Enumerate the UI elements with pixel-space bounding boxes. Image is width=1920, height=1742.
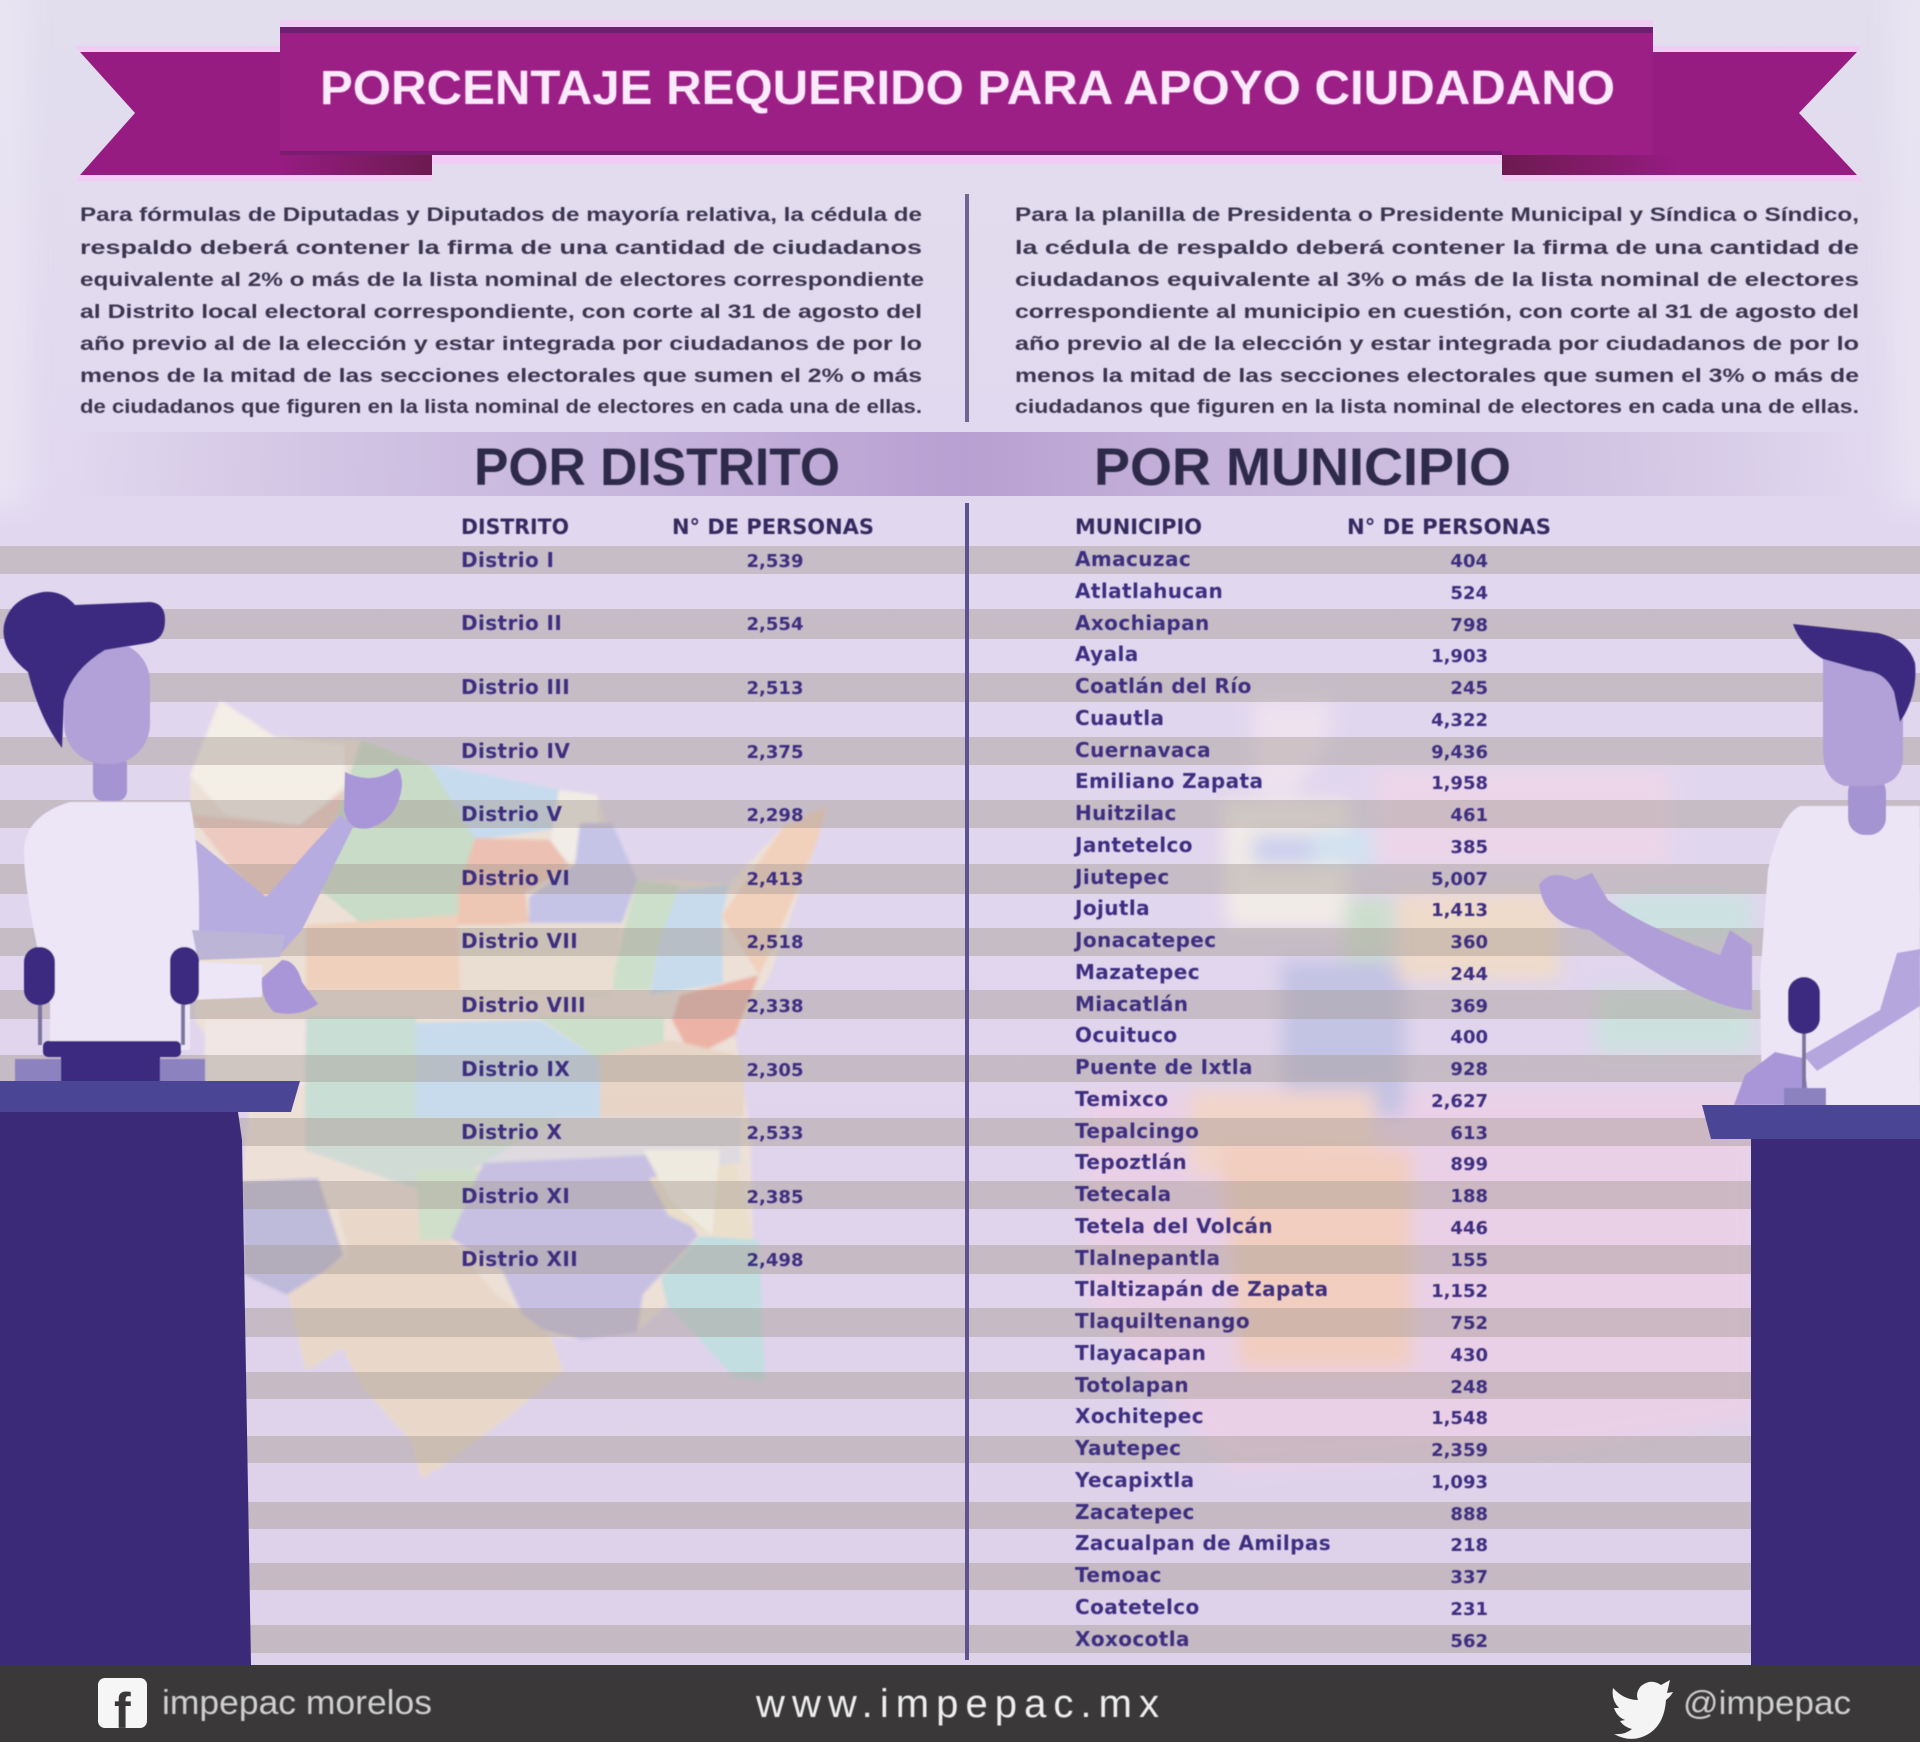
- column: distritos: Distrio II: [461, 611, 562, 635]
- column: personas por municipio: 798: [1450, 615, 1488, 636]
- column: municipios: Amacuzac: [1075, 547, 1191, 571]
- column: personas por municipio: 1,413: [1431, 900, 1488, 921]
- column: municipios: Tepalcingo: [1075, 1119, 1199, 1143]
- column: distritos: Distrio III: [461, 675, 570, 699]
- column: personas por municipio: 1,093: [1431, 1472, 1488, 1493]
- column: distritos: Distrio IV: [461, 739, 570, 763]
- text block: diputaciones: de ciudadanos que figuren en la lista nominal de electores en cada una de ellas.: [80, 397, 922, 418]
- text block: diputaciones: respaldo deberá contener la firma de una cantidad de ciudadanos: [80, 238, 922, 259]
- column: personas por distrito: 2,413: [747, 869, 803, 890]
- column: distritos: Distrio X: [461, 1120, 563, 1144]
- text block: planilla municipal: ciudadanos equivalente al 3% o más de la lista nominal de electores: [1015, 270, 1859, 291]
- column: personas por municipio: 562: [1450, 1631, 1488, 1652]
- column: personas por municipio: 524: [1450, 583, 1488, 604]
- torso: [24, 802, 262, 1050]
- column: municipios: Jiutepec: [1073, 865, 1170, 889]
- text block: diputaciones: al Distrito local electoral correspondiente, con corte al 31 de agosto del: [80, 302, 922, 323]
- column: distritos: Distrio VIII: [461, 993, 586, 1017]
- column: distritos: Distrio I: [461, 548, 554, 572]
- microphone left: [24, 947, 55, 1005]
- column: municipios: Tetecala: [1075, 1182, 1172, 1206]
- face: [64, 642, 150, 764]
- facebook handle: impepac morelos: [162, 1684, 432, 1722]
- text block: diputaciones: año previo al de la elección y estar integrada por ciudadanos de por lo: [80, 334, 922, 355]
- column: municipios: Cuernavaca: [1075, 738, 1211, 762]
- hair: [4, 592, 165, 748]
- column: personas por distrito: 2,498: [747, 1250, 803, 1271]
- column: municipios: Zacatepec: [1075, 1500, 1195, 1524]
- column: personas por distrito: 2,533: [747, 1123, 803, 1144]
- text block: planilla municipal: [1015, 205, 1859, 418]
- column: personas por municipio: 1,958: [1431, 773, 1488, 794]
- column: personas por distrito: [747, 551, 803, 1271]
- column: municipios: Xoxocotla: [1075, 1627, 1190, 1651]
- text block: diputaciones: equivalente al 2% o más de la lista nominal de electores correspondiente: [80, 270, 924, 291]
- column: personas por municipio: 248: [1450, 1377, 1488, 1398]
- column: municipios: Huitzilac: [1075, 801, 1177, 825]
- title: PORCENTAJE REQUERIDO PARA APOYO CIUDADANO: [320, 62, 1615, 115]
- column: personas por municipio: 461: [1450, 805, 1488, 826]
- column: municipios: Temoac: [1075, 1563, 1162, 1587]
- column: municipios: Yecapixtla: [1074, 1468, 1195, 1492]
- column: distritos: Distrio IX: [461, 1057, 570, 1081]
- column: personas por municipio: 2,359: [1431, 1440, 1488, 1461]
- column: personas por municipio: 369: [1450, 996, 1488, 1017]
- column: municipios: Tetela del Volcán: [1075, 1214, 1273, 1238]
- icon: facebook: [98, 1678, 147, 1739]
- column: personas por municipio: 400: [1450, 1027, 1488, 1048]
- column: distritos: Distrio VII: [461, 929, 578, 953]
- left podium: [0, 1081, 300, 1665]
- column: personas por municipio: 2,627: [1431, 1091, 1488, 1112]
- column: personas por municipio: 9,436: [1431, 742, 1488, 763]
- twitter handle: @impepac: [1683, 1684, 1851, 1721]
- lower hand: [262, 960, 318, 1014]
- torso: [1760, 806, 1920, 1105]
- microphone: [1788, 977, 1820, 1034]
- column: personas por municipio: 430: [1450, 1345, 1488, 1366]
- column: municipios: Ayala: [1075, 642, 1139, 666]
- column: personas por municipio: 188: [1450, 1186, 1488, 1207]
- column: municipios: Jonacatepec: [1073, 928, 1217, 952]
- footer: [0, 1665, 1920, 1742]
- column: distritos: Distrio XII: [461, 1247, 578, 1271]
- column: personas por distrito: 2,518: [747, 932, 803, 953]
- column: personas por municipio: 231: [1450, 1599, 1488, 1620]
- website: www.impepac.mx: [755, 1682, 1159, 1726]
- text block: diputaciones: menos de la mitad de las secciones electorales que sumen el 2% o más: [80, 366, 922, 387]
- column: personas por distrito: 2,375: [747, 742, 803, 763]
- column: personas por municipio: 4,322: [1431, 710, 1488, 731]
- column headers: municipio: [1075, 515, 1551, 539]
- column: personas por distrito: 2,539: [747, 551, 803, 572]
- column: personas por municipio: 244: [1450, 964, 1488, 985]
- column headers: municipio: N° DE PERSONAS: [1347, 515, 1551, 539]
- column: municipios: Puente de Ixtla: [1075, 1055, 1253, 1079]
- column: distritos: Distrio VI: [461, 866, 570, 890]
- column: personas por distrito: 2,385: [747, 1187, 803, 1208]
- neck: [1848, 775, 1886, 835]
- column: personas por distrito: 2,338: [747, 996, 803, 1017]
- text block: planilla municipal: ciudadanos que figuren en la lista nominal de electores en cada una de ellas.: [1015, 397, 1859, 418]
- column: municipios: Tlaquiltenango: [1075, 1309, 1250, 1333]
- table: por distrito: [461, 515, 874, 1271]
- right podium: [1702, 1105, 1920, 1665]
- heading: por distrito: POR DISTRITO: [474, 438, 840, 497]
- column: municipios: Temixco: [1075, 1087, 1169, 1111]
- table: por municipio: [1073, 515, 1551, 1652]
- face: [1823, 655, 1903, 786]
- heading: por municipio: POR MUNICIPIO: [1094, 438, 1511, 497]
- column: municipios: Coatlán del Río: [1075, 674, 1252, 698]
- text block: planilla municipal: menos la mitad de las secciones electorales que sumen el 3% o más de: [1015, 366, 1859, 387]
- forward arm: [1803, 949, 1920, 1071]
- illustration: man at podium: [1539, 624, 1920, 1106]
- column: personas por municipio: 899: [1450, 1154, 1488, 1175]
- text block: planilla municipal: correspondiente al municipio en cuestión, con corte al 31 de agosto del: [1015, 302, 1859, 323]
- column headers: municipio: MUNICIPIO: [1075, 515, 1202, 539]
- column: personas por distrito: 2,513: [747, 678, 803, 699]
- hair: [1793, 624, 1915, 722]
- neck: [93, 755, 127, 801]
- column: municipios: Zacualpan de Amilpas: [1075, 1531, 1331, 1555]
- text block: planilla municipal: la cédula de respaldo deberá contener la firma de una cantidad de: [1015, 238, 1859, 259]
- column: municipios: Ocuituco: [1075, 1023, 1178, 1047]
- column: municipios: Yautepec: [1074, 1436, 1181, 1460]
- column: personas por municipio: 1,548: [1431, 1408, 1488, 1429]
- microphone right: [170, 947, 199, 1005]
- column: distritos: [461, 548, 586, 1271]
- column: municipios: Tepoztlán: [1075, 1150, 1187, 1174]
- map: left Morelos map: [190, 700, 827, 1478]
- column: municipios: Jojutla: [1073, 896, 1150, 920]
- column: municipios: Jantetelco: [1073, 833, 1193, 857]
- icon: twitter bird: [1613, 1680, 1673, 1739]
- column: personas por municipio: 752: [1450, 1313, 1488, 1334]
- column: municipios: [1073, 547, 1331, 1651]
- column: municipios: Emiliano Zapata: [1075, 769, 1263, 793]
- text block: planilla municipal: año previo al de la elección y estar integrada por ciudadanos de por lo: [1015, 334, 1859, 355]
- column: personas por municipio: 385: [1450, 837, 1488, 858]
- column headers: distrito: N° DE PERSONAS: [672, 515, 874, 539]
- column: personas por municipio: 245: [1450, 678, 1488, 699]
- section heading band: [70, 432, 1860, 497]
- column: municipios: Cuautla: [1075, 706, 1164, 730]
- column: personas por municipio: 446: [1450, 1218, 1488, 1239]
- column: personas por distrito: 2,554: [747, 614, 803, 635]
- column: distritos: Distrio V: [461, 802, 563, 826]
- column: personas por municipio: 404: [1450, 551, 1488, 572]
- lower arm: [192, 930, 285, 960]
- column: personas por municipio: [1431, 551, 1488, 1652]
- hand raised: [344, 768, 402, 829]
- text block: diputaciones: [80, 205, 924, 418]
- hand forward: [1734, 1052, 1810, 1105]
- column: personas por municipio: 928: [1450, 1059, 1488, 1080]
- column: personas por municipio: 5,007: [1431, 869, 1488, 890]
- title ribbon: [74, 20, 1863, 181]
- column: personas por municipio: 218: [1450, 1535, 1488, 1556]
- column headers: distrito: [461, 515, 874, 539]
- column: personas por municipio: 155: [1450, 1250, 1488, 1271]
- column: personas por municipio: 613: [1450, 1123, 1488, 1144]
- column: municipios: Tlayacapan: [1075, 1341, 1206, 1365]
- column: municipios: Mazatepec: [1075, 960, 1200, 984]
- column: municipios: Atlatlahucan: [1075, 579, 1223, 603]
- column: municipios: Axochiapan: [1075, 611, 1210, 635]
- column: personas por municipio: 1,152: [1431, 1281, 1488, 1302]
- arm gesturing: [1539, 873, 1752, 1010]
- column: personas por distrito: 2,305: [747, 1060, 803, 1081]
- column: personas por distrito: 2,298: [747, 805, 803, 826]
- column headers: distrito: DISTRITO: [461, 515, 569, 539]
- column: personas por municipio: 360: [1450, 932, 1488, 953]
- arm raised: [190, 815, 354, 952]
- table stripes: [0, 546, 1920, 1653]
- illustration: woman at podium: [4, 592, 402, 1083]
- column: municipios: Miacatlán: [1075, 992, 1188, 1016]
- column: personas por municipio: 1,903: [1431, 646, 1488, 667]
- column: municipios: Xochitepec: [1075, 1404, 1204, 1428]
- column: distritos: Distrio XI: [461, 1184, 570, 1208]
- column: municipios: Coatetelco: [1075, 1595, 1200, 1619]
- column: personas por municipio: 888: [1450, 1504, 1488, 1525]
- icon: facebook: f: [114, 1683, 131, 1739]
- column: municipios: Tlaltizapán de Zapata: [1075, 1277, 1329, 1301]
- column: personas por municipio: 337: [1450, 1567, 1488, 1588]
- map: right Morelos map: [1080, 700, 1752, 1470]
- column: municipios: Tlalnepantla: [1075, 1246, 1220, 1270]
- column: municipios: Totolapan: [1075, 1373, 1189, 1397]
- text block: planilla municipal: Para la planilla de Presidenta o Presidente Municipal y Síndica o Síndico,: [1015, 205, 1859, 226]
- text block: diputaciones: Para fórmulas de Diputadas y Diputados de mayoría relativa, la cédula de: [80, 205, 922, 226]
